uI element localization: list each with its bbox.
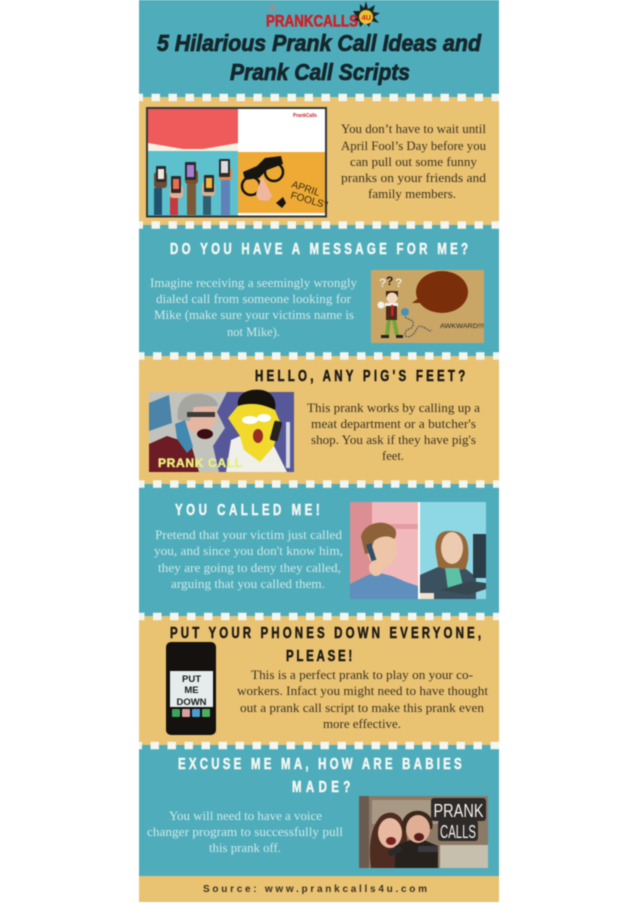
panel: put your phones down xyxy=(166,623,488,735)
panel: you called me xyxy=(154,500,486,599)
image: awkward cartoon: AWKWARD!!! xyxy=(440,323,484,330)
panel: any pig's feet xyxy=(149,366,480,472)
logo: PrankCalls4U: PRANKCALLS xyxy=(266,12,358,30)
heading: YOU CALLED ME! xyxy=(175,500,320,518)
logo: PrankCalls4U: 4U xyxy=(362,13,371,22)
image: April Fools collage: APRIL xyxy=(290,179,321,199)
panel: intro xyxy=(146,107,487,218)
image: phone: PUT xyxy=(182,674,201,685)
text: intro: pranks on your friends and xyxy=(341,170,487,185)
heading: HELLO, ANY PIG'S FEET? xyxy=(255,366,465,384)
heading: MADE? xyxy=(292,777,350,795)
panel: excuse me ma xyxy=(147,754,488,868)
text: This is a perfect prank to play on your co- xyxy=(251,667,473,682)
image: awkward cartoon: ? xyxy=(386,274,393,288)
text: not Mike). xyxy=(227,324,280,339)
image: awkward cartoon: ? xyxy=(379,276,386,290)
text: this prank off. xyxy=(209,840,281,855)
text: changer program to successfully pull xyxy=(147,824,343,839)
text xyxy=(307,400,480,463)
image: prank calls video still: PRANK xyxy=(434,801,484,821)
text: feet. xyxy=(382,448,404,463)
title xyxy=(157,30,482,85)
image: phone: DOWN xyxy=(176,697,207,708)
text: they are going to deny they called, xyxy=(158,560,341,575)
title: Prank Call Scripts xyxy=(230,59,410,85)
image: April Fools collage xyxy=(146,107,329,218)
text: Mike (make sure your victims name is xyxy=(154,307,354,322)
logo: PrankCalls4U xyxy=(266,1,380,30)
text: You will need to have a voice xyxy=(169,808,322,823)
heading xyxy=(170,623,481,664)
heading xyxy=(178,754,462,795)
text xyxy=(237,667,488,731)
text: intro: family members. xyxy=(368,186,456,201)
text: dialed call from someone looking for xyxy=(156,291,352,306)
heading: EXCUSE ME MA, HOW ARE BABIES xyxy=(178,754,462,772)
text: workers. Infact you might need to have thought xyxy=(237,683,488,698)
image: April Fools collage: PrankCalls xyxy=(293,113,317,119)
heading: PUT YOUR PHONES DOWN EVERYONE, xyxy=(170,623,481,641)
text: Pretend that your victim just called xyxy=(155,527,343,542)
heading: PLEASE! xyxy=(286,646,352,664)
source footer: Source: www.prankcalls4u.com xyxy=(203,884,427,895)
image: April Fools collage: FOOLS'! xyxy=(289,190,329,212)
image: phone: ME xyxy=(184,685,199,696)
text: shop. You ask if they have pig's xyxy=(311,432,476,447)
text xyxy=(150,275,357,339)
image: prank calls video still xyxy=(359,796,488,868)
image: Prank call cartoon xyxy=(149,390,294,472)
image: awkward cartoon xyxy=(371,270,484,343)
image: awkward cartoon: ? xyxy=(395,276,402,290)
text: intro: You don’t have to wait until xyxy=(341,121,486,136)
image: Prank call cartoon: PRANK CALL xyxy=(158,456,242,470)
text: Imagine receiving a seemingly wrongly xyxy=(150,275,357,290)
text: intro: April Fool’s Day before you xyxy=(341,138,486,153)
text: meat department or a butcher's xyxy=(311,416,476,431)
heading: DO YOU HAVE A MESSAGE FOR ME? xyxy=(170,239,468,257)
text: intro xyxy=(341,121,487,201)
text: you, and since you don't know him, xyxy=(154,543,343,558)
text: out a prank call script to make this prank even xyxy=(240,700,485,715)
panel: do you have a message xyxy=(150,239,484,343)
image: phone xyxy=(166,642,216,735)
title: 5 Hilarious Prank Call Ideas and xyxy=(157,30,482,56)
text xyxy=(147,808,343,855)
image: prank calls video still: CALLS xyxy=(440,822,476,842)
text: more effective. xyxy=(323,716,401,731)
text xyxy=(154,527,343,591)
text: This prank works by calling up a xyxy=(307,400,480,415)
text: intro: can pull out some funny xyxy=(350,154,477,169)
text: arguing that you called them. xyxy=(171,576,325,591)
image: two people on phones xyxy=(350,502,486,599)
